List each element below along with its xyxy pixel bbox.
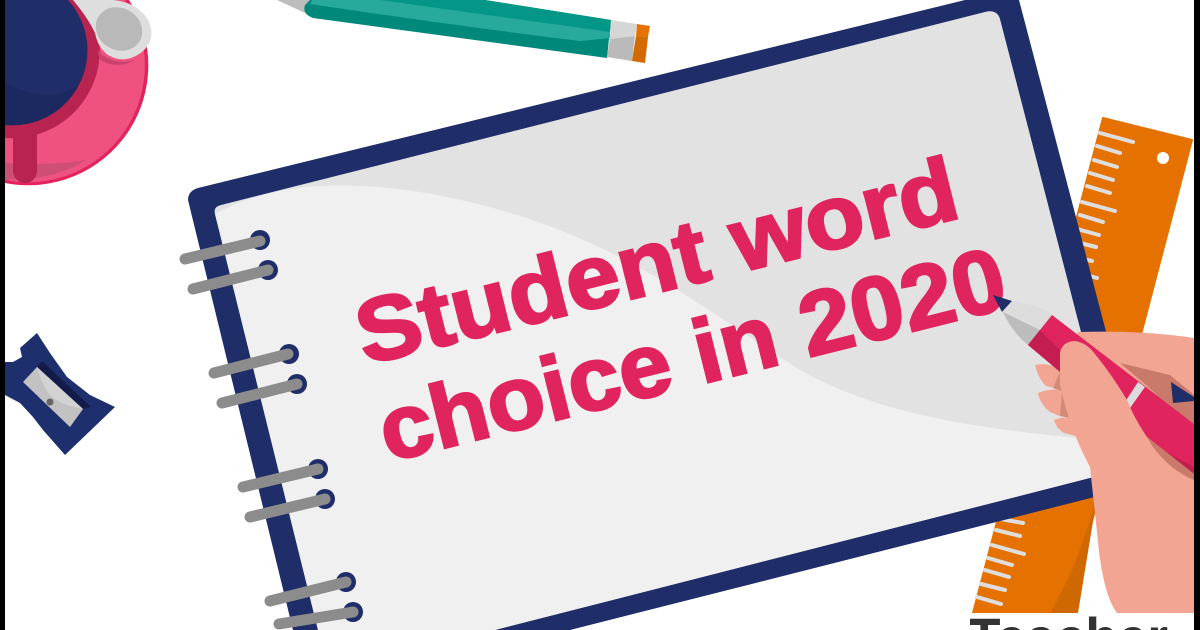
lower fingers: [1035, 364, 1085, 437]
icon: coffee cup from above: [5, 0, 151, 185]
index finger: [1060, 341, 1194, 560]
icon: teal pencil: [277, 0, 650, 63]
pen: [993, 295, 1194, 474]
icon: orange ruler: [973, 118, 1192, 613]
cap of pen: [1171, 382, 1194, 403]
palm shadow: [1120, 363, 1194, 430]
ruler tick marks: [977, 133, 1133, 604]
icon: pencil sharpener: [5, 333, 115, 455]
heading: Student word: [346, 139, 968, 384]
heading: choice in 2020: [369, 229, 1016, 481]
icon: hand holding pen: [993, 295, 1194, 613]
shadow under pen: [1147, 437, 1194, 480]
page highlight swoosh: [215, 186, 1117, 630]
heading: [346, 139, 1016, 481]
palm: [1070, 332, 1194, 613]
spiral binding rings: [185, 230, 363, 624]
